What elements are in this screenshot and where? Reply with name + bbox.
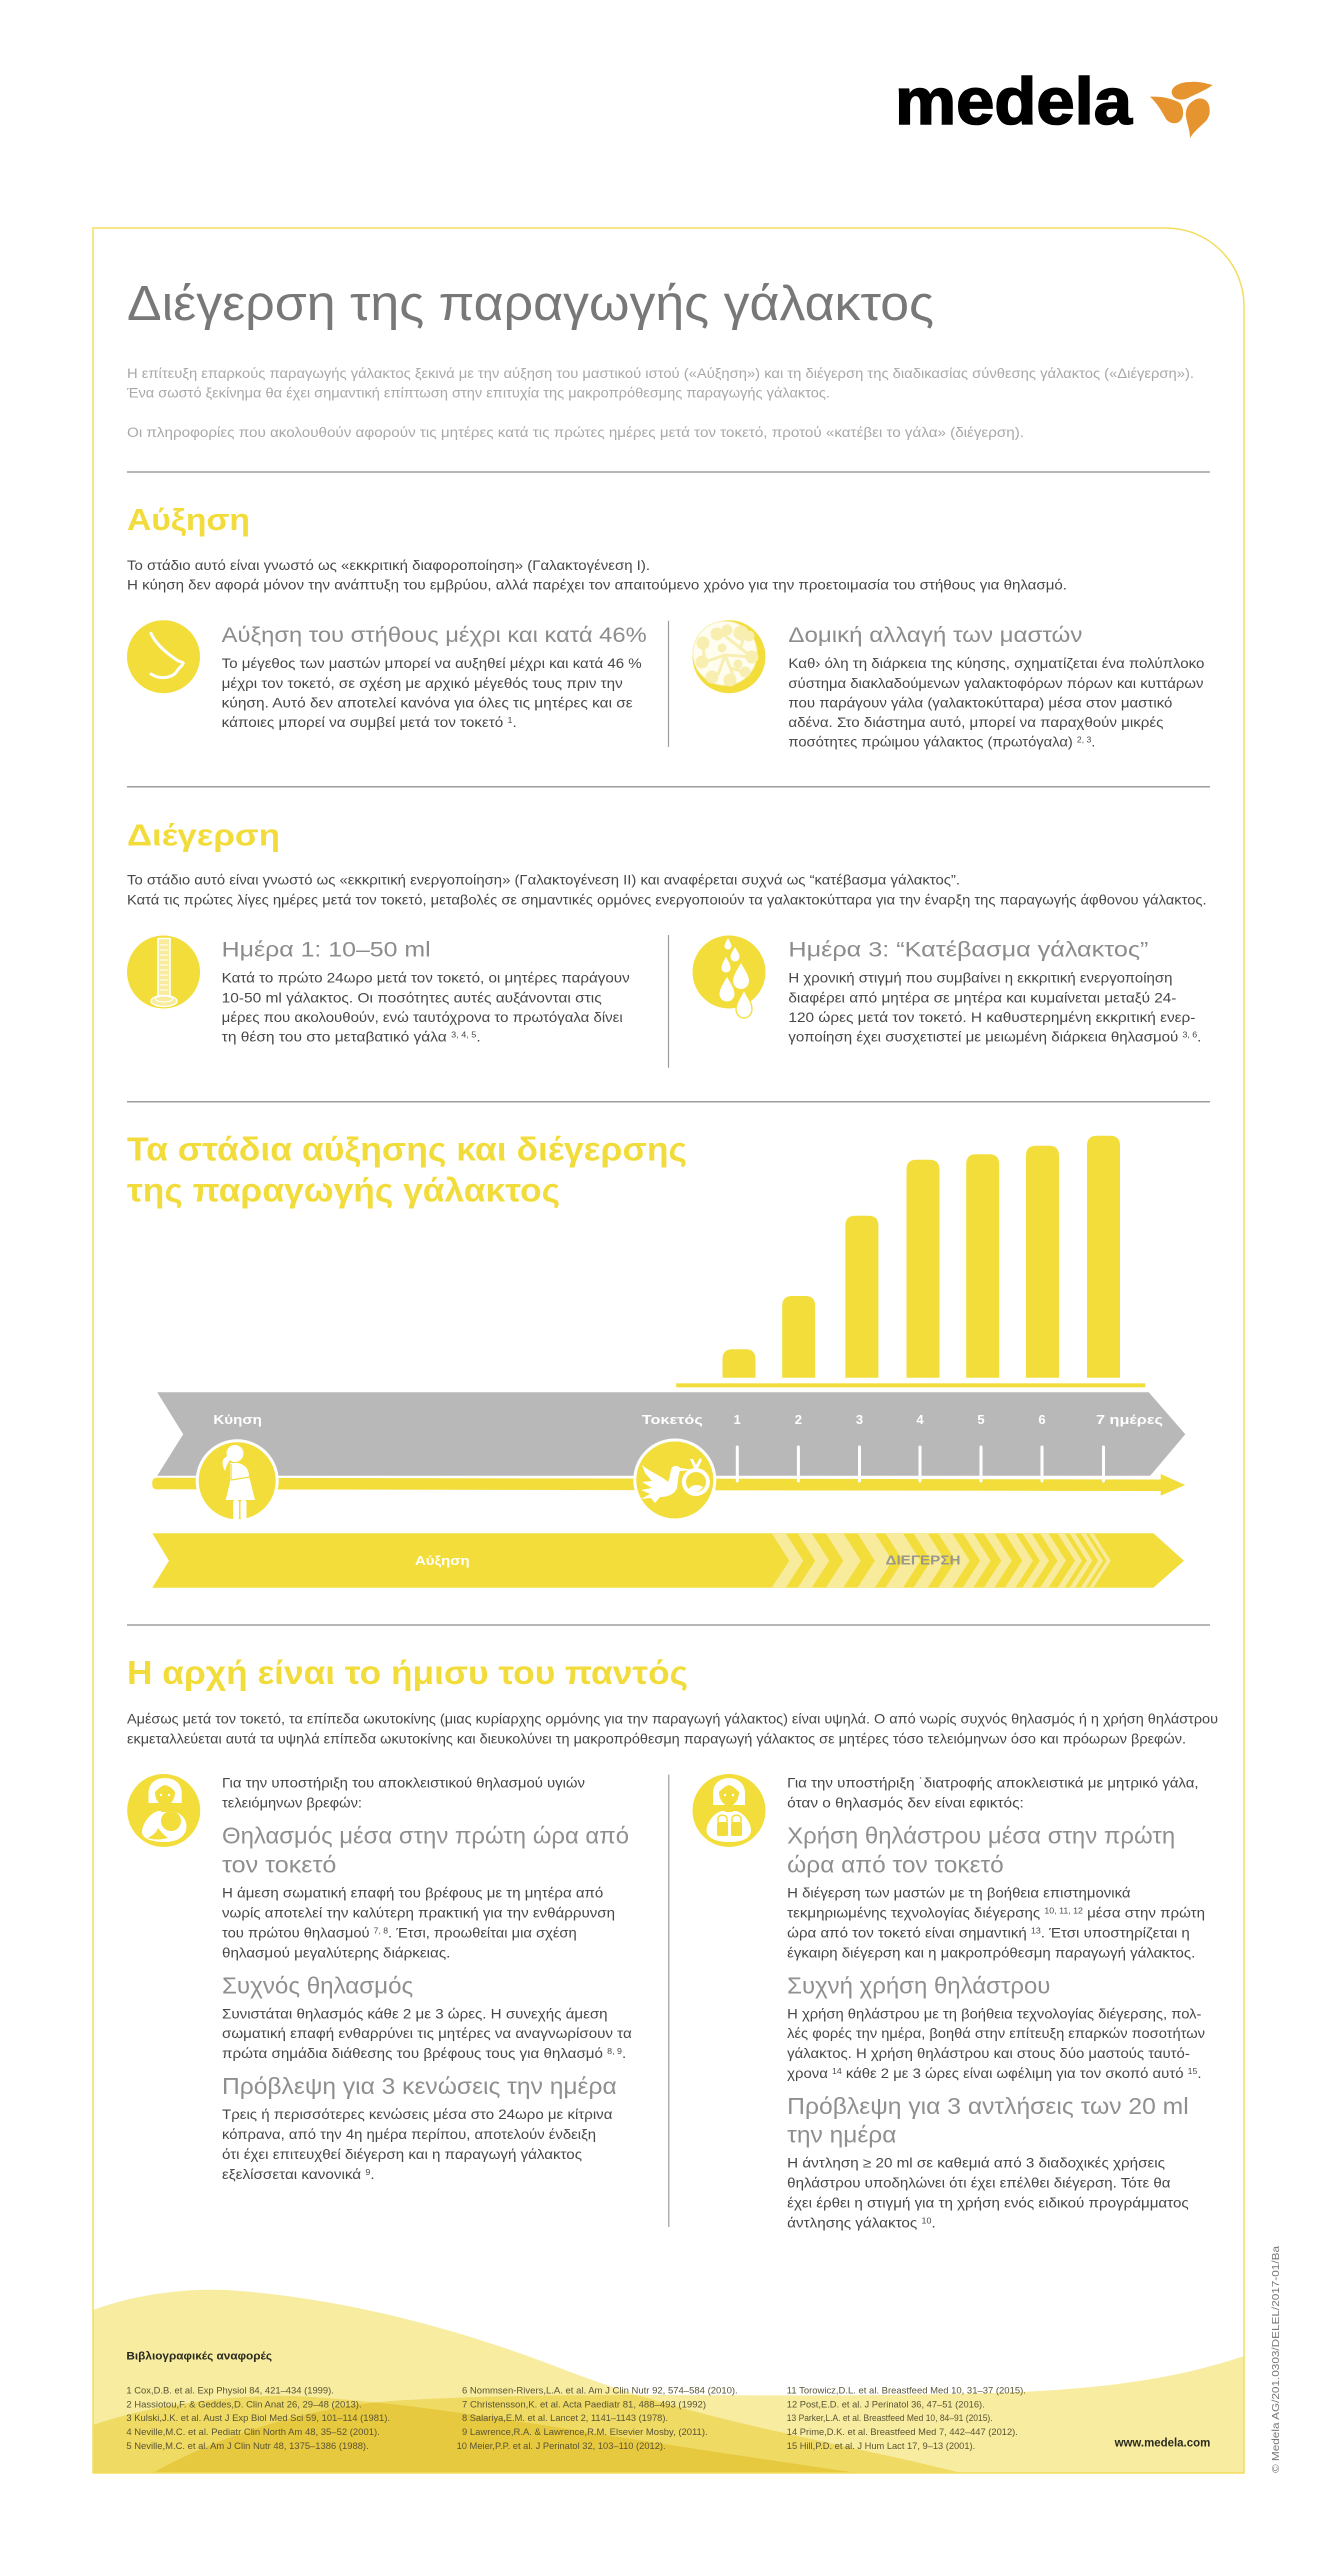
- block: breastfeeding: θηλασμού μεγαλύτερης διάρκειας.: [222, 1945, 450, 1960]
- block: day 3: [788, 939, 1201, 1045]
- block: breastfeeding: σωματική επαφή ενθαρρύνει τις μητέρες να αναγνωρίσουν τα: [222, 2026, 632, 2041]
- block: structural change: Δομική αλλαγή των μαστών: [788, 624, 1082, 647]
- block: pumping: χρονα: [787, 2066, 825, 2081]
- references list: 3 Kulski,J.K. et al. Aust J Exp Biol Med Sci 59, 101–114 (1981).: [126, 2413, 390, 2424]
- block: pumping: μέσα στην πρώτη: [1083, 1906, 1205, 1921]
- block: pumping: γάλακτος. Η χρήση θηλάστρου και στους δύο μαστούς ταυτό-: [787, 2046, 1190, 2061]
- block: breastfeeding: Η άμεση σωματική επαφή του βρέφους με τη μητέρα από: [222, 1886, 604, 1901]
- good start description: εκμεταλλεύεται αυτά τα υψηλά επίπεδα ωκυτοκίνης και διευκολύνει τη μακροπρόθεσμη παραγωγή γάλακτος σε μητέρες τόσο τελειόμηνων όσο και πρόωρων βρεφών.: [127, 1732, 1186, 1746]
- block: breastfeeding: .: [622, 2046, 626, 2061]
- block: pumping: 14: [832, 2067, 842, 2076]
- block: breastfeeding: ότι έχει επιτευχθεί διέγερση και η παραγωγή γάλακτος: [222, 2147, 582, 2162]
- block: structural change: αδένα. Στο διάστημα αυτό, μπορεί να παραχθούν μικρές: [788, 715, 1164, 730]
- block: pumping: .: [931, 2215, 936, 2230]
- block: pumping: Συχνή χρήση θηλάστρου: [787, 1972, 1050, 1998]
- block: breastfeeding: 7, 8: [374, 1927, 389, 1936]
- references list: 6 Nommsen-Rivers,L.A. et al. Am J Clin Nutr 92, 574–584 (2010).: [462, 2385, 738, 2396]
- block: breast growth: [222, 624, 647, 730]
- block: breast growth: μέχρι τον τοκετό, σε σχέση με αρχικό μέγεθός τους πριν την: [222, 676, 623, 691]
- heading: Διέγερση: Διέγερση: [127, 818, 280, 853]
- block: breastfeeding: τελειόμηνων βρεφών:: [222, 1796, 362, 1811]
- block: pumping: θηλάστρου υποδηλώνει ότι έχει επέλθει διέγερση. Τότε θα: [787, 2176, 1171, 2191]
- block: breastfeeding: εξελίσσεται κανονικά: [222, 2167, 347, 2182]
- block: pumping: την ημέρα: [787, 2122, 896, 2148]
- bar chart: [676, 1136, 1145, 1387]
- Διέγερση description: Κατά τις πρώτες λίγες ημέρες μετά τον τοκετό, μεταβολές σε σημαντικές ορμόνες ενεργοποιούν τα γαλακτοκύτταρα για την έναρξη της παραγωγής άφθονου γάλακτος.: [127, 892, 1207, 907]
- block: day 1: Κατά το πρώτο 24ωρο μετά τον τοκετό, οι μητέρες παράγουν: [222, 970, 630, 985]
- block: breast growth: κάποιες μπορεί να συμβεί μετά τον τοκετό: [222, 715, 475, 730]
- references list: [126, 2385, 1026, 2452]
- block: breast growth: Το μέγεθος των μαστών μπορεί να αυξηθεί μέχρι και κατά 46 %: [222, 656, 642, 671]
- Διέγερση description: Το στάδιο αυτό είναι γνωστό ως «εκκριτική ενεργοποίηση» (Γαλακτογένεση ΙΙ) και αναφέρεται συχνά ως “κατέβασμα γάλακτος”.: [127, 872, 960, 887]
- block: structural change: 2, 3: [1077, 736, 1092, 744]
- heading: Αύξηση: Αύξηση: [127, 502, 250, 537]
- heading: a good start: Η αρχή είναι το ήμισυ του παντός: [127, 1654, 688, 1691]
- references list: 5 Neville,M.C. et al. Am J Clin Nutr 48, 1375–1386 (1988).: [126, 2441, 369, 2452]
- title: Διέγερση της παραγωγής γάλακτος: [127, 277, 934, 331]
- references list: 12 Post,E.D. et al. J Perinatol 36, 47–51 (2016).: [787, 2399, 985, 2410]
- references list: 14 Prime,D.K. et al. Breastfeed Med 7, 442–447 (2012).: [787, 2427, 1018, 2438]
- block: breastfeeding: Για την υποστήριξη του αποκλειστικού θηλασμού υγιών: [222, 1776, 585, 1791]
- day ticks: [737, 1447, 1104, 1481]
- block: pumping: [787, 1776, 1205, 2230]
- timeline labels: 2: [795, 1412, 802, 1427]
- block: day 1: .: [476, 1030, 481, 1045]
- timeline yellow arrow: [152, 1474, 1185, 1496]
- block: structural change: ποσότητες πρώιμου γάλακτος (πρωτόγαλα): [788, 734, 1052, 750]
- block: breast growth: Αύξηση του στήθους μέχρι και κατά 46%: [222, 624, 647, 647]
- block: structural change: σύστημα διακλαδούμενων γαλακτοφόρων πόρων και κυττάρων: [788, 676, 1204, 691]
- heading: stages chart: [127, 1131, 687, 1208]
- block: day 3: διαφέρει από μητέρα σε μητέρα και κυμαίνεται μεταξύ 24-: [788, 990, 1176, 1005]
- timeline labels: 6: [1038, 1412, 1046, 1427]
- references list: 13 Parker,L.A. et al. Breastfeed Med 10, 84–91 (2015).: [787, 2413, 993, 2424]
- Διέγερση description: [127, 872, 1207, 907]
- panel border: [93, 228, 1244, 2473]
- timeline labels: 4: [916, 1412, 924, 1427]
- Αύξηση description: [127, 558, 1067, 593]
- block: day 1: Ημέρα 1: 10–50 ml: [222, 939, 431, 962]
- block: day 3: 3, 6: [1182, 1031, 1198, 1040]
- block: pumping: . Έτσι υποστηρίζεται η: [1041, 1926, 1190, 1941]
- icon: pregnant woman: [197, 1441, 277, 1521]
- good start description: Αμέσως μετά τον τοκετό, τα επίπεδα ωκυτοκίνης (μιας κυρίαρχης ορμόνης για την παραγωγή γάλακτος) είναι υψηλά. Ο από νωρίς συχνός θηλασμός ή η χρήση θηλάστρου: [127, 1712, 1218, 1726]
- block: breastfeeding: Θηλασμός μέσα στην πρώτη ώρα από: [222, 1822, 629, 1848]
- block: breastfeeding: τον τοκετό: [222, 1851, 336, 1877]
- references list: 4 Neville,M.C. et al. Pediatr Clin North Am 48, 35–52 (2001).: [126, 2427, 380, 2438]
- block: pumping: Χρήση θηλάστρου μέσα στην πρώτη: [787, 1822, 1175, 1848]
- references list: 8 Salariya,E.M. et al. Lancet 2, 1141–1143 (1978).: [462, 2413, 668, 2424]
- block: pumping: ώρα από τον τοκετό είναι σημαντική: [787, 1926, 1005, 1941]
- block: pumping: λές φορές την ημέρα, βοηθά στην επίτευξη επαρκών ποσοτήτων: [787, 2026, 1205, 2041]
- block: pumping: κάθε 2 με 3 ώρες είναι ωφέλιμη για τον σκοπό αυτό: [842, 2066, 1188, 2081]
- block: breastfeeding: Τρεις ή περισσότερες κενώσεις μέσα στο 24ωρο με κίτρινα: [222, 2107, 612, 2122]
- block: pumping: άντλησης γάλακτος: [787, 2215, 904, 2230]
- icon: breast: [127, 620, 200, 693]
- heading: stages chart: Τα στάδια αύξησης και διέγερσης: [127, 1131, 687, 1168]
- block: pumping: 15: [1188, 2067, 1198, 2076]
- block: pumping: όταν ο θηλασμός δεν είναι εφικτός:: [787, 1796, 1024, 1811]
- intro text: Οι πληροφορίες που ακολουθούν αφορούν τις μητέρες κατά τις πρώτες ημέρες μετά τον τοκετό, προτού «κατέβει το γάλα» (διέγερση).: [127, 425, 1024, 440]
- block: breast growth: .: [512, 715, 517, 730]
- block: pumping: Πρόβλεψη για 3 αντλήσεις των 20 ml: [787, 2093, 1189, 2119]
- icon: pumping mother: [692, 1774, 766, 1847]
- growth and stimulation arrow: ΔΙΕΓΕΡΣΗ: [886, 1552, 960, 1567]
- block: pumping: τεκμηριωμένης τεχνολογίας διέγερσης: [787, 1906, 1017, 1921]
- block: breastfeeding: 9: [365, 2168, 371, 2177]
- block: breastfeeding: του πρώτου θηλασμού: [222, 1926, 359, 1941]
- timeline labels: Τοκετός: [642, 1412, 703, 1427]
- intro text: [126, 366, 1194, 440]
- website: www.medela.com: [1114, 2435, 1210, 2449]
- block: day 3: Ημέρα 3: “Κατέβασμα γάλακτος”: [788, 939, 1148, 962]
- icon: measuring cylinder: [127, 936, 200, 1008]
- block: day 3: Η χρονική στιγμή που συμβαίνει η εκκριτική ενεργοποίηση: [788, 970, 1172, 985]
- block: day 3: γοποίηση έχει συσχετιστεί με μειωμένη διάρκεια θηλασμού: [788, 1030, 1142, 1045]
- block: breastfeeding: 8, 9: [607, 2047, 623, 2056]
- block: breast growth: 1: [507, 716, 513, 725]
- timeline labels: 3: [856, 1412, 863, 1427]
- references list: 7 Christensson,K. et al. Acta Paediatr 81, 488–493 (1992): [462, 2399, 706, 2410]
- icon: milk drops: [692, 936, 766, 1018]
- references list: 1 Cox,D.B. et al. Exp Physiol 84, 421–434 (1999).: [126, 2385, 334, 2396]
- block: pumping: 10, 11, 12: [1044, 1907, 1084, 1916]
- block: pumping: ώρα από τον τοκετό: [787, 1851, 1004, 1877]
- logo: medela: medela: [895, 64, 1133, 138]
- references list: 11 Torowicz,D.L. et al. Breastfeed Med 10, 31–37 (2015).: [787, 2385, 1026, 2396]
- block: day 1: [222, 939, 630, 1045]
- references heading: Βιβλιογραφικές αναφορές: [126, 2350, 272, 2362]
- references list: 2 Hassiotou,F. & Geddes,D. Clin Anat 26, 29–48 (2013).: [126, 2399, 362, 2410]
- intro text: Ένα σωστό ξεκίνημα θα έχει σημαντική επίπτωση στην επιτυχία της μακροπρόθεσμης παραγωγής γάλακτος.: [126, 386, 830, 400]
- heading: stages chart: της παραγωγής γάλακτος: [127, 1171, 560, 1208]
- icon: breastfeeding mother: [127, 1774, 200, 1847]
- references list: 15 Hill,P.D. et al. J Hum Lact 17, 9–13 (2001).: [787, 2441, 975, 2452]
- block: pumping: Η άντληση ≥ 20 ml σε καθεμιά από 3 διαδοχικές χρήσεις: [787, 2156, 1165, 2171]
- block: breastfeeding: Πρόβλεψη για 3 κενώσεις την ημέρα: [222, 2073, 617, 2099]
- block: pumping: Η χρήση θηλάστρου με τη βοήθεια τεχνολογίας διέγερσης, πολ-: [787, 2006, 1202, 2022]
- icon: breast structure: [692, 620, 766, 693]
- Αύξηση description: Η κύηση δεν αφορά μόνον την ανάπτυξη του εμβρύου, αλλά παρέχει τον απαιτούμενο χρόνο για την προετοιμασία του στήθους για θηλασμό.: [127, 578, 1067, 593]
- block: breastfeeding: νωρίς αποτελεί την καλύτερη πρακτική για την ενθάρρυνση: [222, 1906, 615, 1921]
- block: pumping: .: [1197, 2066, 1202, 2081]
- block: pumping: έγκαιρη διέγερση και η μακροπρόθεσμη παραγωγή γάλακτος.: [787, 1945, 1195, 1960]
- block: pumping: Για την υποστήριξη ˙διατροφής αποκλειστικά με μητρικό γάλα,: [787, 1776, 1199, 1791]
- block: breastfeeding: Συνιστάται θηλασμός κάθε 2 με 3 ώρες. Η συνεχής άμεση: [222, 2006, 608, 2022]
- block: day 1: τη θέση του στο μεταβατικό γάλα: [222, 1030, 420, 1045]
- block: pumping: έχει έρθει η στιγμή για τη χρήση ενός ειδικού προγράμματος: [787, 2196, 1189, 2211]
- block: structural change: .: [1091, 734, 1095, 750]
- block: structural change: Καθ› όλη τη διάρκεια της κύησης, σχηματίζεται ένα πολύπλοκο: [788, 656, 1205, 671]
- block: breastfeeding: . Έτσι, προωθείται μια σχέση: [388, 1926, 577, 1941]
- timeline labels: 1: [734, 1412, 741, 1427]
- block: pumping: Η διέγερση των μαστών με τη βοήθεια επιστημονικά: [787, 1886, 1131, 1901]
- block: day 1: 10-50 ml γάλακτος. Οι ποσότητες αυτές αυξάνονται στις: [222, 990, 602, 1005]
- block: breastfeeding: [222, 1776, 632, 2182]
- background waves: [93, 2290, 1244, 2473]
- block: breastfeeding: .: [370, 2167, 375, 2182]
- block: breastfeeding: κόπρανα, από την 4η ημέρα περίπου, αποτελούν ένδειξη: [222, 2127, 596, 2142]
- references list: 10 Meier,P.P. et al. J Perinatol 32, 103–110 (2012).: [457, 2441, 666, 2452]
- block: day 1: 3, 4, 5: [451, 1031, 477, 1040]
- copyright note: © Medela AG/201.0303/DELEL/2017-01/Ba: [1270, 2246, 1282, 2473]
- block: day 3: .: [1197, 1030, 1201, 1045]
- block: breastfeeding: Συχνός θηλασμός: [222, 1972, 413, 1998]
- block: breastfeeding: πρώτα σημάδια διάθεσης του βρέφους τους για θηλασμό: [222, 2046, 566, 2061]
- block: structural change: [788, 624, 1205, 750]
- timeline labels: 7 ημέρες: [1096, 1412, 1163, 1427]
- good start description: [127, 1712, 1218, 1746]
- growth and stimulation arrow: [152, 1533, 1184, 1588]
- timeline labels: [213, 1412, 1163, 1427]
- block: day 3: 120 ώρες μετά τον τοκετό. Η καθυστερημένη εκκριτική ενερ-: [788, 1010, 1195, 1025]
- growth and stimulation arrow: Αύξηση: [415, 1553, 470, 1568]
- references list: 9 Lawrence,R.A. & Lawrence,R.M. Elsevier Mosby, (2011).: [462, 2427, 708, 2438]
- intro text: Η επίτευξη επαρκούς παραγωγής γάλακτος ξεκινά με την αύξηση του μαστικού ιστού («Αύξηση») και τη διέγερση της διαδικασίας σύνθεσης γάλακτος («Διέγερση»).: [127, 366, 1194, 381]
- timeline labels: Κύηση: [213, 1412, 262, 1427]
- block: breast growth: κύηση. Αυτό δεν αποτελεί κανόνα για όλες τις μητέρες και σε: [222, 696, 633, 710]
- block: pumping: 10: [922, 2216, 932, 2225]
- block: day 1: μέρες που ακολουθούν, ενώ ταυτόχρονα το πρωτόγαλα δίνει: [222, 1010, 623, 1025]
- Αύξηση description: Το στάδιο αυτό είναι γνωστό ως «εκκριτική διαφοροποίηση» (Γαλακτογένεση Ι).: [127, 558, 650, 573]
- timeline labels: 5: [977, 1412, 985, 1427]
- icon: stork with baby: [635, 1440, 715, 1520]
- timeline grey arrow: [157, 1392, 1185, 1476]
- block: pumping: 13: [1031, 1927, 1041, 1936]
- block: structural change: που παράγουν γάλα (γαλακτοκύτταρα) μέσα στον μαστικό: [788, 696, 1173, 710]
